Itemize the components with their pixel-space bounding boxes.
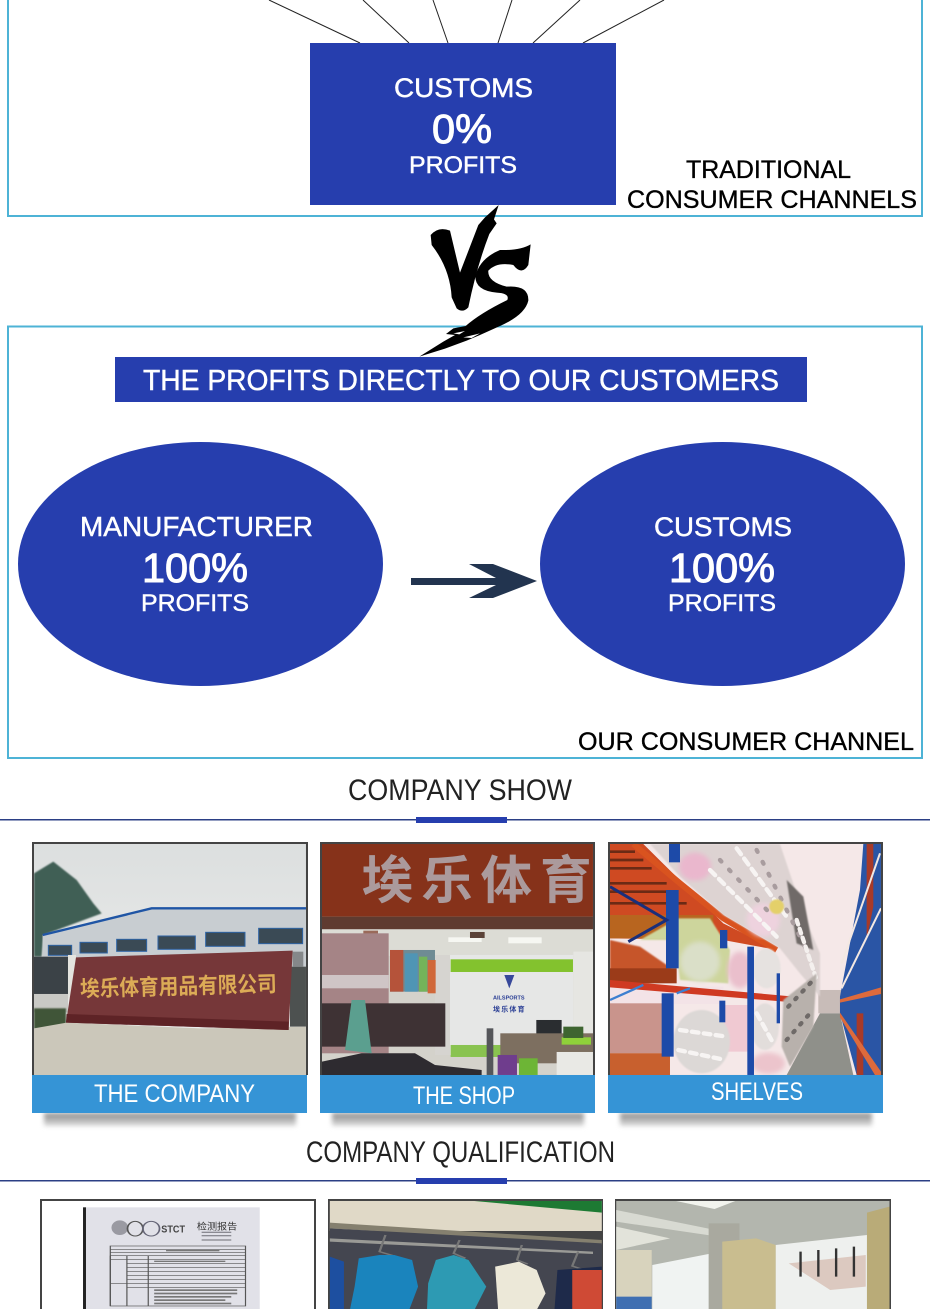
ellipse: customs 100% profits: CUSTOMS <box>654 512 792 542</box>
photo: shop front: 埃乐体育 <box>493 1004 525 1013</box>
customs 0% profits box: PROFITS <box>409 152 517 179</box>
caption bar: shelves <box>608 1075 883 1113</box>
ellipse: manufacturer 100% profits: PROFITS <box>141 590 249 617</box>
caption: our consumer channel: OUR CONSUMER CHANNEL <box>578 728 914 756</box>
photo card: the company <box>32 842 308 1113</box>
heading bar <box>115 357 807 402</box>
photo: jerseys on display <box>328 1199 603 1309</box>
photo: test report certificate: 检测报告 <box>197 1221 237 1231</box>
ellipse: customs 100% profits <box>540 442 905 686</box>
photo card: the shop <box>320 842 595 1113</box>
photo: interior staircase <box>615 1199 891 1309</box>
upper fabric bolts <box>650 844 820 997</box>
caption bar: the shop: THE SHOP <box>413 1082 515 1110</box>
customs 0% profits box <box>310 43 616 205</box>
right hand racking <box>840 844 881 1075</box>
middle shelf fabric <box>640 918 730 983</box>
connector lines to customs box <box>269 0 664 43</box>
photo: shop front: AILSPORTS <box>493 995 525 1001</box>
ellipse: customs 100% profits: 100% <box>669 545 775 591</box>
customs 0% profits box: 0% <box>432 106 492 152</box>
heading bar: THE PROFITS DIRECTLY TO OUR CUSTOMERS <box>143 365 779 397</box>
ellipse: manufacturer 100% profits: 100% <box>142 545 248 591</box>
caption bar: the shop <box>320 1075 595 1113</box>
caption: traditional consumer channels: TRADITIONAL <box>686 156 851 184</box>
photo: shop front: 埃乐体育 <box>362 852 592 910</box>
shadow strips under photo cards <box>44 1113 872 1126</box>
section heading: company qualification <box>0 1136 930 1184</box>
blue uprights <box>662 844 780 1075</box>
arrow <box>411 564 537 598</box>
ellipse: manufacturer 100% profits <box>18 442 383 686</box>
ellipse: manufacturer 100% profits: MANUFACTURER <box>80 511 313 542</box>
section heading: company qualification: COMPANY QUALIFICATION <box>306 1136 615 1169</box>
photo: factory building and sign: 埃乐体育用品有限公司 <box>80 971 277 1002</box>
photo: shop front <box>322 844 594 1075</box>
caption: traditional consumer channels: CONSUMER CHANNELS <box>627 186 917 214</box>
panel: our consumer channel <box>8 326 922 758</box>
panel: traditional consumer channels <box>8 0 922 216</box>
icon: brush VS mark <box>419 205 531 357</box>
section heading: company show <box>0 774 930 823</box>
lower shelf fabric <box>610 1003 662 1054</box>
section heading: company show: COMPANY SHOW <box>348 774 573 807</box>
caption bar: the company: THE COMPANY <box>94 1080 255 1108</box>
photo: warehouse shelves <box>610 844 881 1075</box>
customs 0% profits box: CUSTOMS <box>394 73 533 103</box>
caption: traditional consumer channels <box>627 156 917 214</box>
photo card: shelves <box>608 842 883 1113</box>
photo: test report certificate <box>40 1199 316 1309</box>
caption bar: the company <box>32 1075 307 1113</box>
top-left red racking <box>610 844 777 950</box>
photo: test report certificate: STCT <box>161 1224 185 1235</box>
ellipse: customs 100% profits: PROFITS <box>668 590 776 617</box>
photo: factory building and sign <box>34 844 306 1075</box>
caption bar: shelves: SHELVES <box>711 1078 803 1106</box>
